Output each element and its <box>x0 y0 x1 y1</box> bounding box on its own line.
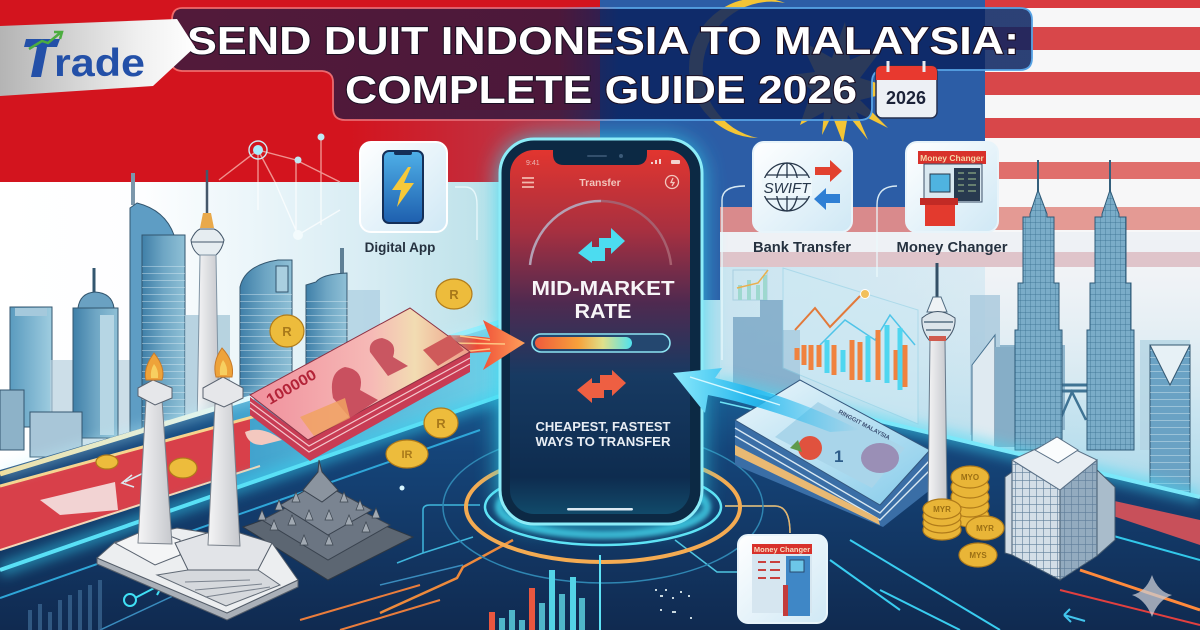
red arrow <box>815 160 842 182</box>
Trade logo banner <box>0 19 195 96</box>
caption: CHEAPEST, FASTEST <box>536 420 671 434</box>
calendar icon 2026 <box>876 61 937 118</box>
connector lines <box>455 186 897 360</box>
Indonesian rupiah banknote stack <box>245 308 470 461</box>
center vertical connector <box>599 555 601 630</box>
network rings around phone base <box>443 431 763 583</box>
card: bottom Money Changer <box>738 535 827 623</box>
logo T <box>24 39 60 77</box>
logo green trend arrow <box>29 32 62 49</box>
kiosk illustration <box>920 164 982 226</box>
screen title: Transfer <box>579 177 621 189</box>
sign text: Money Changer <box>754 545 810 554</box>
label: Money Changer <box>896 240 1008 256</box>
logo wordmark: rade <box>54 42 145 85</box>
phone <box>500 139 702 524</box>
ringgit coin stacks: MYR <box>933 505 951 514</box>
rupiah coins: R <box>282 324 292 339</box>
chart panel <box>737 268 918 424</box>
caption <box>536 420 671 449</box>
rate heading <box>532 277 675 323</box>
status bar <box>526 159 680 167</box>
Malaysian skyline <box>733 270 1190 515</box>
progress bar <box>532 334 670 352</box>
rate heading: MID-MARKET <box>532 277 675 300</box>
banknote label: RINGGIT MALAYSIA <box>837 409 891 442</box>
phone with lightning bolt icon <box>383 151 423 223</box>
KL Tower <box>922 263 955 506</box>
Malaysian ringgit banknote stack <box>735 380 930 527</box>
title plate <box>172 8 1032 120</box>
ringgit coin stacks <box>923 466 1004 567</box>
floor with light beams <box>0 300 1200 630</box>
menu icon <box>522 178 534 187</box>
center bar chart <box>492 570 582 630</box>
rupiah coins: R <box>449 287 459 302</box>
rupiah coins: IR <box>402 449 413 461</box>
title text: SEND DUIT INDONESIA TO MALAYSIA: <box>187 20 1019 63</box>
title text: COMPLETE GUIDE 2026 <box>345 69 857 112</box>
rate heading: RATE <box>574 300 632 323</box>
caption: WAYS TO TRANSFER <box>536 435 670 449</box>
orange arrow into phone <box>430 320 525 370</box>
card: Money Changer <box>896 142 1008 256</box>
isometric bank building <box>1005 437 1115 580</box>
label: Digital App <box>365 240 435 255</box>
card: Bank Transfer <box>753 142 852 256</box>
rupiah coins <box>96 279 472 478</box>
orange exchange arrows <box>577 370 626 403</box>
calendar icon 2026: 2026 <box>886 88 926 108</box>
Petronas twin towers <box>1015 160 1134 450</box>
cyan exchange arrows <box>578 228 625 263</box>
rate gauge arc <box>530 201 671 265</box>
flag emblem: crescent and star <box>689 0 900 143</box>
info icon <box>666 176 678 188</box>
status bar: 9:41 <box>526 160 540 167</box>
card: Digital App <box>360 142 447 255</box>
SWIFT globe: SWIFT <box>764 180 812 197</box>
Indonesian skyline <box>0 170 380 457</box>
sparkle <box>1132 575 1172 617</box>
ringgit coin stacks: MYS <box>969 551 987 560</box>
ringgit coin stacks: MYR <box>976 524 994 533</box>
banknote value: 100000 <box>264 366 320 408</box>
rupiah coins: R <box>436 416 446 431</box>
title text <box>187 20 1019 112</box>
cyan arrow into phone <box>673 368 860 432</box>
ringgit coin stacks: MYO <box>961 473 979 482</box>
label: Bank Transfer <box>753 240 851 256</box>
Monas towers with Borobudur temple <box>97 348 413 620</box>
kiosk sign: Money Changer <box>920 153 985 163</box>
network lines over red flag <box>219 134 340 240</box>
banknote value: 1 <box>834 447 843 466</box>
blue arrow <box>814 188 840 210</box>
